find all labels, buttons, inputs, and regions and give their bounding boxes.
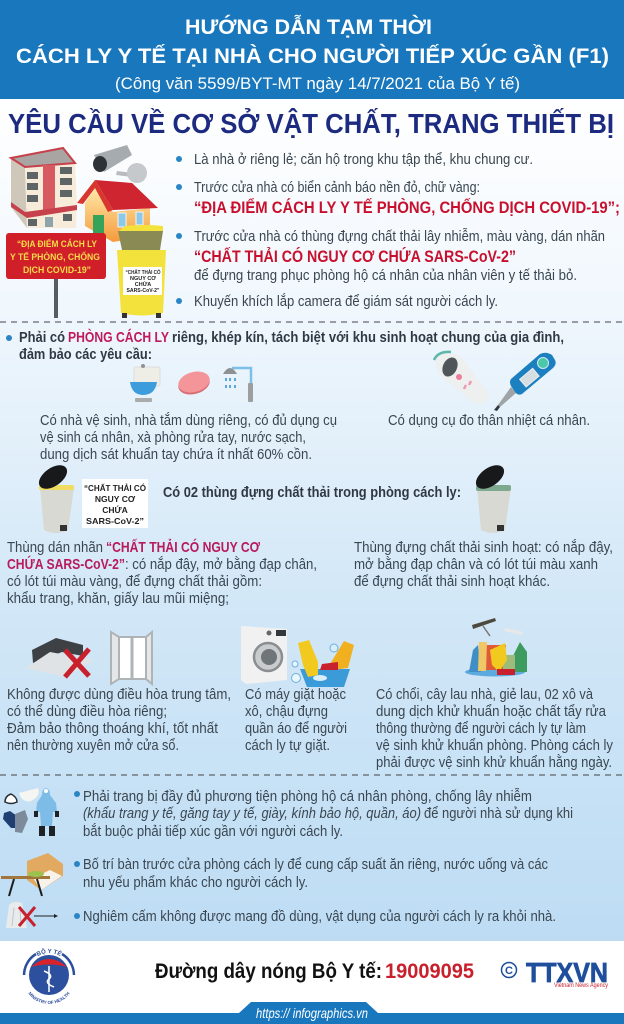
text block: infectious waste bin: có lót túi màu vàng, để đựng chất thải gồm:: [7, 573, 262, 590]
title line 1: HƯỚNG DẪN TẠM THỜI: [185, 15, 432, 39]
icon: wash basin with gloves: [292, 640, 354, 687]
text block: washing: [245, 686, 347, 754]
icon: shower: [223, 368, 253, 402]
footer bar with website: https:// infographics.vn: [256, 1005, 368, 1021]
text block: private bathroom: Có nhà vệ sinh, nhà tắm dùng riêng, có đủ dụng cụ: [40, 412, 337, 429]
text block: location requirements: Khuyến khích lắp camera để giám sát người cách ly.: [194, 293, 498, 310]
icon: washing machine: [241, 626, 287, 684]
label: infectious waste: NGUY CƠ: [95, 494, 136, 504]
text block: isolation room intro: Phải có: [19, 329, 65, 346]
text block: cleaning: [376, 686, 613, 771]
icon: soap: [176, 368, 212, 398]
icon: table in front of door: [1, 853, 63, 896]
text block: private bathroom: [40, 412, 337, 463]
text block: delivery table: [74, 856, 548, 891]
text block: cleaning: Có chổi, cây lau nhà, giẻ lau, 02 xô và: [376, 686, 594, 703]
illustration: yellow waste bin: “CHẤT THẢI CÓ: [126, 268, 161, 276]
text block: infectious waste bin: “CHẤT THẢI CÓ NGUY CƠ: [106, 538, 260, 556]
icon: household waste bin: [472, 460, 511, 533]
icon: protective equipment: [3, 788, 59, 836]
text block: infectious waste bin: khẩu trang, khăn, giấy lau mũi miệng;: [7, 590, 229, 607]
text block: location requirements: Trước cửa nhà có biển cảnh báo nền đỏ, chữ vàng:: [194, 179, 480, 196]
text block: thermometer: Có dụng cụ đo thân nhiệt cá nhân.: [388, 412, 590, 429]
text block: isolation room intro: riêng, khép kín, tách biệt với khu sinh hoạt chung của gia đình,: [172, 329, 564, 346]
text block: private bathroom: vệ sinh cá nhân, xà phòng rửa tay, nước sạch,: [40, 429, 306, 446]
label: infectious waste: [82, 479, 148, 528]
text block: protective equipment: [74, 788, 573, 840]
text block: household waste bin: [354, 539, 613, 590]
text block: infectious waste bin: CHỨA SARS-CoV-2”: [7, 555, 125, 573]
illustration: red warning sign: DỊCH COVID-19”: [23, 265, 91, 275]
logo: Ministry of Health: BỘ Y TẾ: [36, 948, 62, 956]
icon: cleaning supplies: [465, 618, 527, 676]
text block: isolation room intro: [6, 328, 564, 363]
logo: TTXVN: C: [505, 965, 513, 977]
text block: private bathroom: dung dịch sát khuẩn tay chứa ít nhất 60% cồn.: [40, 446, 312, 463]
illustration: yellow waste bin: CHỨA: [135, 281, 151, 288]
header band: [0, 0, 624, 99]
illustration: red warning sign: [6, 233, 106, 318]
illustration: yellow waste bin: SARS-CoV-2”: [126, 288, 160, 294]
text block: infectious waste bin: Thùng dán nhãn: [7, 539, 103, 556]
text block: delivery table: Bố trí bàn trước cửa phòng cách ly để cung cấp suất ăn riêng, nước uống và các: [83, 856, 548, 873]
text block: air conditioning and ventilation: Đảm bảo thông thoáng khí, tốt nhất: [7, 720, 219, 737]
text block: cleaning: thông thường để người cách ly tự làm: [376, 720, 586, 737]
text block: prohibition: Nghiêm cấm không được mang đồ dùng, vật dụng của người cách ly ra khỏi nhà.: [83, 908, 556, 925]
text block: protective equipment: Phải trang bị đầy đủ phương tiện phòng hộ cá nhân phòng, chống lây nhiễm: [83, 788, 532, 805]
text block: location requirements: để đựng trang phục phòng hộ cá nhân của nhân viên y tế thải bỏ.: [194, 267, 577, 284]
text block: isolation room intro: PHÒNG CÁCH LY: [68, 328, 169, 346]
text block: washing: cách ly tự giặt.: [245, 737, 330, 754]
footer panel: [22, 948, 608, 1004]
text block: washing: xô, chậu đựng: [245, 703, 328, 720]
text block: location requirements: “CHẤT THẢI CÓ NGUY CƠ CHỨA SARS-CoV-2”: [194, 247, 516, 266]
logo: TTXVN: Vietnam News Agency: [554, 983, 608, 989]
text block: air conditioning and ventilation: [7, 686, 231, 754]
icon: central air conditioner crossed out: [26, 638, 94, 677]
label: infectious waste: CHỨA: [102, 504, 128, 515]
illustration: yellow waste bin: NGUY CƠ: [130, 276, 156, 282]
icon: open window: [111, 632, 152, 684]
label: infectious waste: “CHẤT THẢI CÓ: [84, 482, 146, 493]
illustration: house: [77, 180, 158, 242]
text block: household waste bin: mở bằng đạp chân và có lót túi màu xanh: [354, 556, 598, 573]
text block: location requirements: [176, 151, 620, 310]
illustration: security camera: [93, 145, 147, 183]
label: infectious waste: SARS-CoV-2”: [86, 516, 144, 526]
text: two waste bins: Có 02 thùng đựng chất thải trong phòng cách ly:: [163, 484, 461, 501]
subtitle: (Công văn 5599/BYT-MT ngày 14/7/2021 của Bộ Y tế): [115, 74, 520, 93]
text block: infectious waste bin: : có nắp đậy, mở bằng đạp chân,: [125, 556, 317, 573]
logo: Ministry of Health: MINISTRY OF HEALTH: [28, 992, 70, 1004]
icon: toilet: [130, 364, 160, 402]
text block: protective equipment: bắt buộc phải tiếp xúc gần với người cách ly.: [83, 823, 343, 840]
hotline: 19009095: [385, 960, 474, 983]
text block: air conditioning and ventilation: Không được dùng điều hòa trung tâm,: [7, 686, 231, 703]
text block: air conditioning and ventilation: nên thường xuyên mở cửa sổ.: [7, 737, 179, 754]
hotline: Đường dây nóng Bộ Y tế:: [155, 960, 382, 983]
text block: washing: quần áo để người: [245, 720, 347, 737]
text block: air conditioning and ventilation: có thể dùng điều hòa riêng;: [7, 703, 167, 720]
footer bar with website: [0, 1002, 624, 1024]
text block: infectious waste bin: [7, 538, 317, 607]
text block: washing: Có máy giặt hoặc: [245, 686, 346, 703]
logo: TTXVN: TTXVN: [526, 957, 608, 988]
illustration: apartment building: [11, 148, 77, 228]
icon: digital thermometer: [494, 353, 556, 411]
logo: TTXVN: [502, 957, 608, 989]
text block: delivery table: nhu yếu phẩm khác cho người cách ly.: [83, 874, 308, 891]
text block: protective equipment: để người nhà sử dụng khi: [424, 805, 573, 822]
text block: household waste bin: để đựng chất thải sinh hoạt khác.: [354, 573, 550, 590]
illustration: red warning sign: “ĐỊA ĐIỂM CÁCH LY: [17, 238, 97, 249]
logo: Ministry of Health: [22, 948, 76, 1004]
icon: infrared thermometer: [434, 352, 489, 404]
text block: isolation room intro: đảm bảo các yêu cầu:: [19, 346, 152, 363]
illustration: yellow waste bin: [117, 225, 166, 318]
title line 2: CÁCH LY Y TẾ TẠI NHÀ CHO NGƯỜI TIẾP XÚC GẦN (F1): [16, 44, 609, 68]
icon: belongings prohibited: [6, 902, 58, 928]
icon: infectious waste bin: [35, 460, 74, 533]
text block: location requirements: Là nhà ở riêng lẻ; căn hộ trong khu tập thể, khu chung cư.: [194, 151, 533, 168]
text block: protective equipment: (khẩu trang y tế, găng tay y tế, giày, kính bảo hộ, quần, áo): [83, 805, 421, 822]
illustration: red warning sign: Y TẾ PHÒNG, CHỐNG: [10, 251, 100, 262]
